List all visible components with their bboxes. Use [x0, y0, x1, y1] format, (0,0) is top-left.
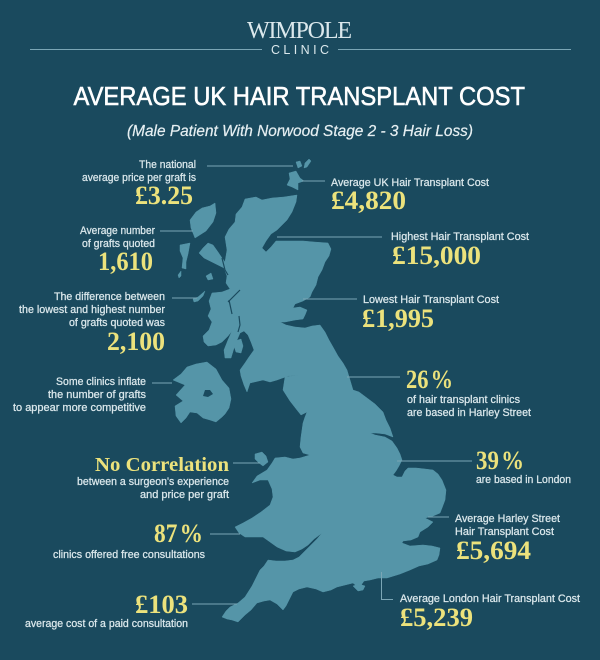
- callout: Harley Street cost: £5,694: [456, 536, 531, 565]
- lough neagh: [203, 390, 213, 397]
- callout: free consultations: [53, 519, 240, 561]
- callout: London share: 39 %: [476, 446, 524, 475]
- island: Lewis and Harris: [190, 203, 216, 238]
- callout: London cost: £5,239: [400, 603, 473, 632]
- callout: Harley Street share: of hair transplant clinics: [407, 394, 521, 406]
- callout: no correlation: [77, 454, 260, 501]
- callout: graft difference: 2,100: [107, 327, 165, 356]
- island: Arran: [234, 339, 243, 353]
- callout: average grafts quoted: of grafts quoted: [82, 238, 155, 250]
- callout: London cost: Average London Hair Transplant Cost: [400, 593, 580, 605]
- callout: Harley Street cost: [428, 513, 560, 565]
- subtitle: (Male Patient With Norwood Stage 2 - 3 Hair Loss): [127, 123, 473, 140]
- callout: average grafts quoted: 1,610: [98, 247, 153, 276]
- callout: London cost: [382, 572, 580, 632]
- UK map: [173, 159, 446, 622]
- callout: lowest cost: Lowest Hair Transplant Cost: [363, 294, 499, 306]
- island: Mull: [206, 273, 213, 280]
- callout: average UK cost: [302, 177, 489, 215]
- callout: highest cost: £15,000: [392, 241, 481, 270]
- sea lochs: [222, 258, 240, 332]
- logo: Wimpole Clinic: [30, 18, 571, 57]
- callout: Harley Street cost: Average Harley Street: [455, 513, 560, 525]
- callout: price per graft: [82, 159, 293, 210]
- callout: average UK cost: £4,820: [331, 186, 406, 215]
- callout: price per graft: The national: [139, 159, 196, 171]
- callout: inflated grafts: Some clinics inflate: [56, 376, 146, 388]
- callout: average grafts quoted: Average number: [80, 225, 155, 237]
- callout: free consultations: clinics offered free consultations: [53, 549, 206, 561]
- callout: paid consultation cost: £103: [135, 590, 188, 619]
- island: Anglesey: [255, 452, 268, 466]
- island: Barra: [178, 271, 181, 278]
- callout: Harley Street share: [347, 365, 531, 419]
- callout: no correlation: between a surgeon's experience: [77, 476, 229, 488]
- Northern Ireland: [173, 362, 231, 423]
- island: Uists: [180, 243, 190, 269]
- callout: graft difference: the lowest and highest number: [19, 304, 165, 316]
- callout: average grafts quoted: [80, 225, 193, 276]
- callout: paid consultation cost: average cost of a paid consultation: [25, 618, 188, 630]
- callout: Harley Street share: are based in Harley Street: [407, 407, 531, 419]
- callout: inflated grafts: to appear more competitive: [13, 402, 146, 414]
- callout: graft difference: [19, 291, 197, 356]
- callout: London share: are based in London: [476, 474, 571, 486]
- callout: price per graft: £3.25: [135, 181, 193, 210]
- callout: highest cost: [277, 231, 529, 270]
- island: Orkney: [287, 171, 304, 190]
- callout: paid consultation cost: [25, 590, 237, 630]
- callout: inflated grafts: [13, 376, 172, 414]
- callout: graft difference: The difference between: [54, 291, 165, 303]
- logo: Wimpole Clinic: WIMPOLE: [247, 18, 352, 44]
- callout: lowest cost: £1,995: [362, 304, 434, 333]
- callout: price per graft: average price per graft is: [82, 172, 197, 184]
- Isle of Wight: [353, 584, 365, 591]
- logo: Wimpole Clinic: CLINIC: [271, 43, 329, 57]
- island: Shetland: [296, 159, 311, 168]
- callout: Harley Street cost: Hair Transplant Cost: [455, 526, 554, 538]
- callout: Harley Street share: 26 %: [406, 365, 453, 394]
- callout: highest cost: Highest Hair Transplant Cost: [391, 231, 529, 243]
- callout: graft difference: of grafts quoted was: [69, 317, 166, 329]
- mainland Great Britain: [199, 195, 446, 622]
- callout: no correlation: and price per graft: [140, 489, 229, 501]
- callout: no correlation: No Correlation: [95, 454, 229, 476]
- island: Skye fragment: [193, 291, 205, 302]
- callout: lowest cost: [303, 294, 499, 333]
- title: AVERAGE UK HAIR TRANSPLANT COST: [74, 83, 525, 111]
- callout: London share: [397, 446, 571, 486]
- callout: inflated grafts: the number of grafts: [48, 389, 147, 401]
- callout: free consultations: 87 %: [154, 519, 203, 548]
- callout: average UK cost: Average UK Hair Transplant Cost: [331, 177, 489, 189]
